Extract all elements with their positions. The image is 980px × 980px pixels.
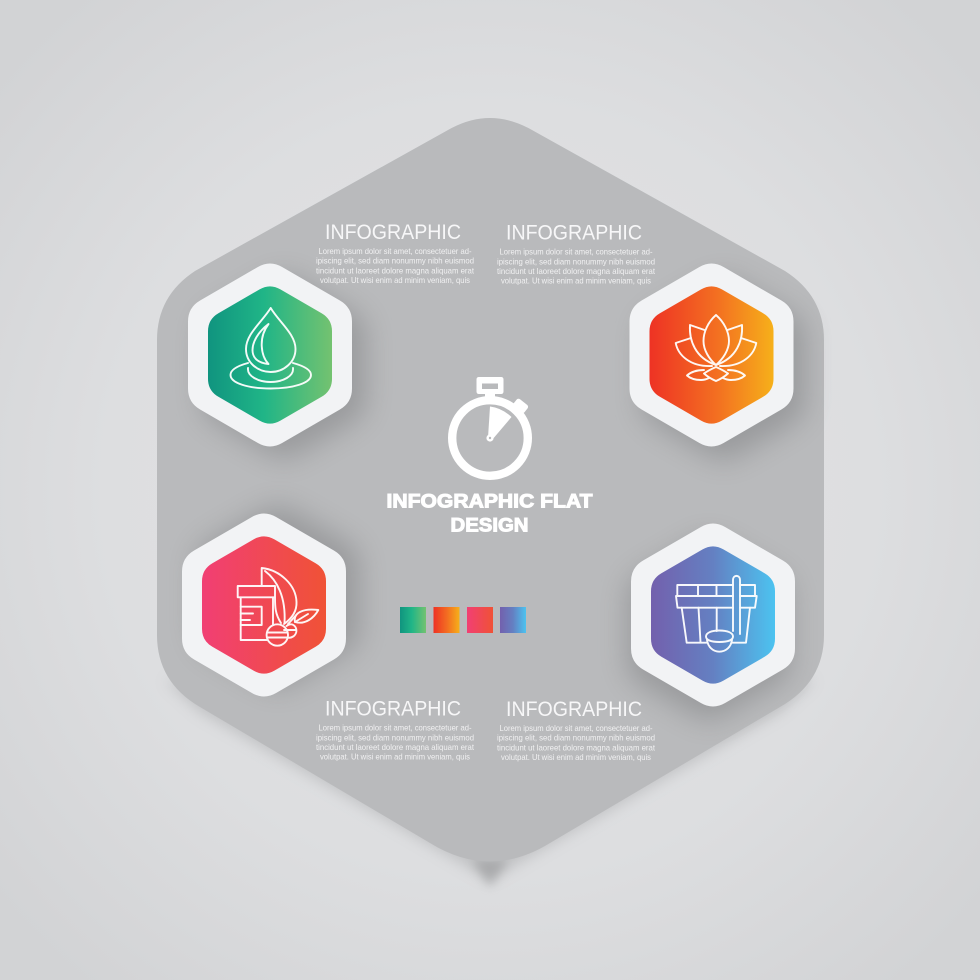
heading: DESIGN xyxy=(450,516,528,536)
icon: lotus xyxy=(676,315,756,381)
text block: top left: volutpat. Ut wisi enim ad minim veniam, quis xyxy=(320,275,470,285)
text block: top left: INFOGRAPHIC xyxy=(325,221,461,244)
text block: bottom left: ipiscing elit, sed diam nonummy nibh euismod xyxy=(316,732,474,742)
text block: top left: ipiscing elit, sed diam nonummy nibh euismod xyxy=(316,256,474,266)
text block: bottom left: tincidunt ut laoreet dolore magna aliquam erat xyxy=(316,742,475,752)
icon: herbal pills xyxy=(238,568,318,646)
text block: bottom left xyxy=(316,698,475,762)
hexagon: sauna bucket xyxy=(627,524,795,720)
text block: bottom right xyxy=(497,698,656,762)
text block: bottom left: volutpat. Ut wisi enim ad minim veniam, quis xyxy=(320,752,470,762)
text block: top right: Lorem ipsum dolor sit amet, consectetuer ad- xyxy=(500,247,653,257)
heading: INFOGRAPHIC FLAT xyxy=(386,492,593,512)
text block: top right: volutpat. Ut wisi enim ad minim veniam, quis xyxy=(501,276,651,286)
hexagon: water drop xyxy=(188,264,366,458)
text block: bottom left: INFOGRAPHIC xyxy=(325,698,461,720)
text block: top right xyxy=(497,222,656,286)
text block: bottom left: Lorem ipsum dolor sit amet, consectetuer ad- xyxy=(318,723,472,733)
text block: top left xyxy=(316,221,475,285)
text block: bottom right: Lorem ipsum dolor sit amet, consectetuer ad- xyxy=(500,723,653,733)
text block: bottom right: volutpat. Ut wisi enim ad minim veniam, quis xyxy=(501,752,651,762)
text block: top right: INFOGRAPHIC xyxy=(506,222,642,244)
colour swatches xyxy=(400,607,526,633)
text block: bottom right: ipiscing elit, sed diam nonummy nibh euismod xyxy=(497,733,655,743)
text block: top left: Lorem ipsum dolor sit amet, consectetuer ad- xyxy=(318,246,472,256)
text block: bottom right: tincidunt ut laoreet dolore magna aliquam erat xyxy=(497,742,656,752)
text block: top left: tincidunt ut laoreet dolore magna aliquam erat xyxy=(316,265,475,275)
icon: sauna bucket xyxy=(676,576,757,652)
hexagon: herbal pills xyxy=(182,506,360,696)
heading xyxy=(386,492,593,536)
text block: bottom right: INFOGRAPHIC xyxy=(506,698,642,721)
icon: water drop xyxy=(230,308,311,388)
panel: central hexagon xyxy=(157,118,824,887)
hexagon: lotus xyxy=(630,264,806,460)
icon: stopwatch xyxy=(452,377,529,476)
text block: top right: ipiscing elit, sed diam nonummy nibh euismod xyxy=(497,256,655,266)
text block: top right: tincidunt ut laoreet dolore magna aliquam erat xyxy=(497,266,656,276)
